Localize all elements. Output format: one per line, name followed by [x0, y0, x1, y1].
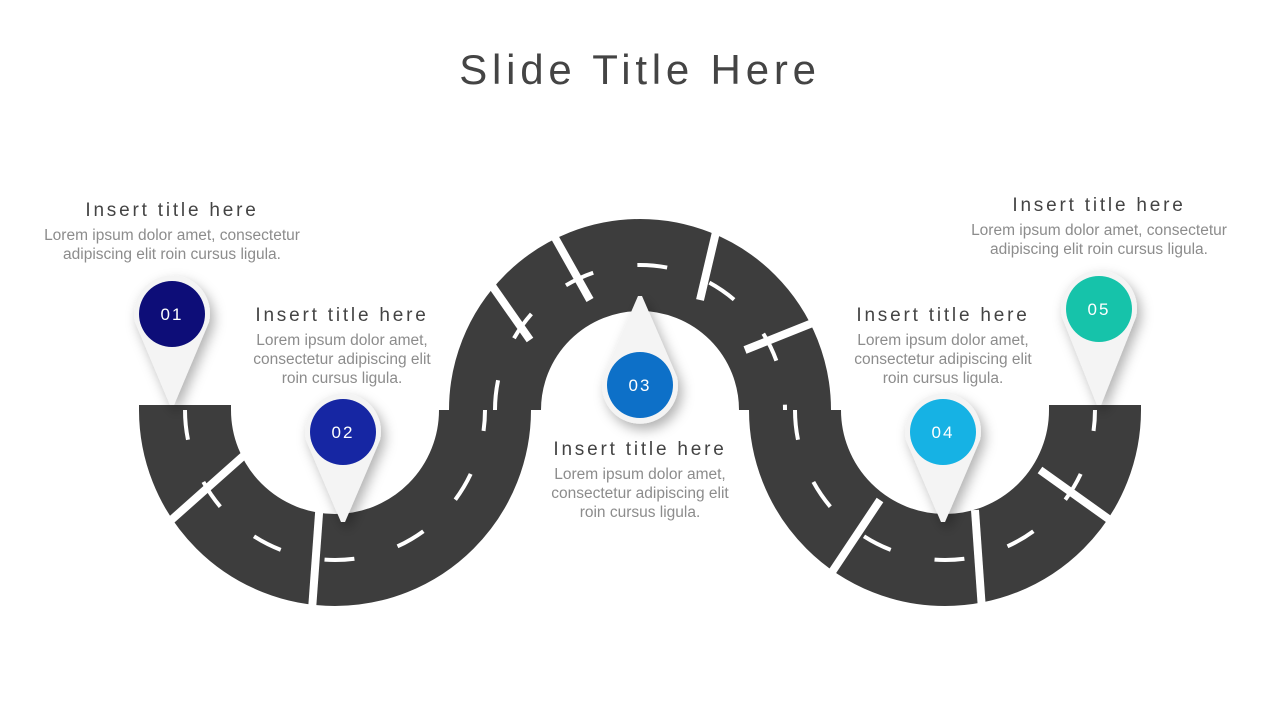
text 01: [44, 200, 300, 263]
text 02: Lorem ipsum dolor amet,: [256, 332, 428, 349]
title: Slide Title Here: [459, 46, 821, 93]
pin 02: 02: [332, 423, 354, 442]
pin 02: [305, 393, 381, 522]
text 04: consectetur adipiscing elit: [854, 351, 1032, 368]
text 03: [551, 439, 729, 521]
text 03: roin cursus ligula.: [580, 504, 700, 521]
text 01: Lorem ipsum dolor amet, consectetur: [44, 227, 300, 244]
text 05: Lorem ipsum dolor amet, consectetur: [971, 222, 1227, 239]
text 02: consectetur adipiscing elit: [253, 351, 431, 368]
road: [160, 215, 1110, 610]
pin 05: [1061, 270, 1137, 405]
text 04: Insert title here: [856, 305, 1030, 326]
pin 01: [134, 275, 210, 405]
pin 04: 04: [932, 423, 954, 442]
text 02: [253, 305, 431, 387]
pin 04: [905, 393, 981, 522]
text 04: [854, 305, 1032, 387]
pin 05: 05: [1088, 300, 1110, 319]
text 01: adipiscing elit roin cursus ligula.: [63, 246, 281, 263]
text 03: Insert title here: [553, 439, 727, 460]
text 02: roin cursus ligula.: [282, 370, 402, 387]
text 03: Lorem ipsum dolor amet,: [554, 466, 726, 483]
text 05: Insert title here: [1012, 195, 1186, 216]
pin 03: 03: [629, 376, 651, 395]
text 05: adipiscing elit roin cursus ligula.: [990, 241, 1208, 258]
text 02: Insert title here: [255, 305, 429, 326]
text 03: consectetur adipiscing elit: [551, 485, 729, 502]
text 05: [971, 195, 1227, 258]
pin 03: [602, 296, 678, 424]
text 01: Insert title here: [85, 200, 259, 221]
text 04: Lorem ipsum dolor amet,: [857, 332, 1029, 349]
pin 01: 01: [161, 305, 183, 324]
text 04: roin cursus ligula.: [883, 370, 1003, 387]
